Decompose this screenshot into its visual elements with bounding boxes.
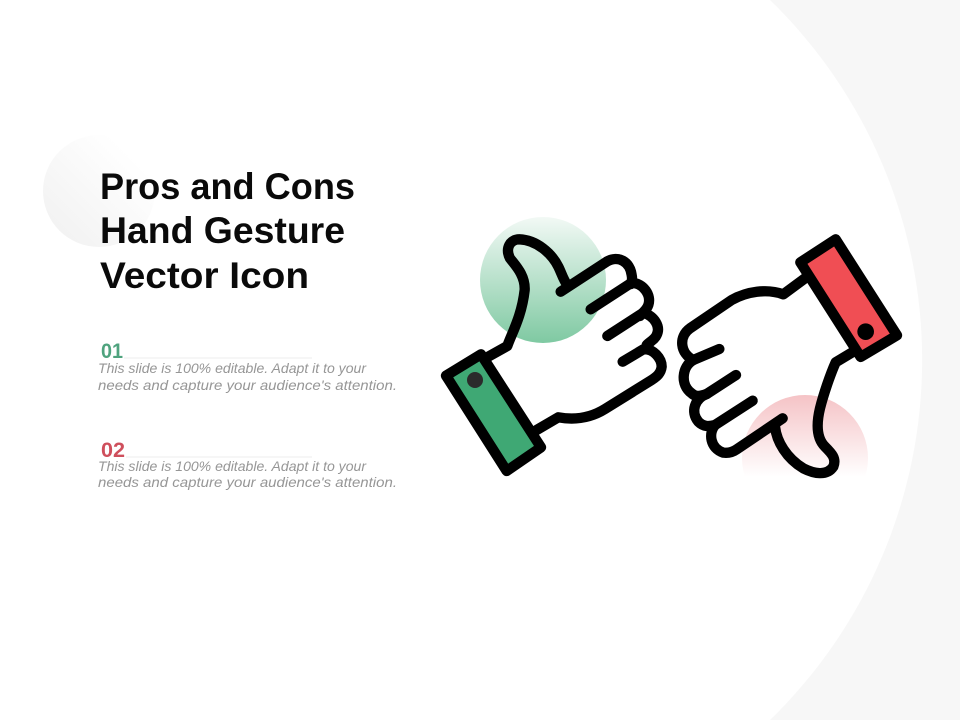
- fingers: [561, 259, 632, 292]
- icon: thumbs down hand: [682, 239, 897, 473]
- cuff button: [857, 323, 874, 340]
- icon: red circle behind thumbs down: [742, 395, 868, 521]
- icon: green circle behind thumbs up: [480, 217, 606, 343]
- background: grey right side with large white arc: [770, 0, 960, 720]
- thumb: [775, 352, 853, 473]
- item 02: cons text block: needs and capture your audience's attention.: [98, 474, 397, 490]
- decorative grey circle behind title: [43, 135, 155, 247]
- icon: thumbs up hand: [446, 239, 662, 471]
- hand outline: [488, 239, 567, 357]
- item 01: pros text block: [98, 340, 397, 393]
- item 01: pros text block: This slide is 100% editable. Adapt it to your: [98, 360, 367, 376]
- item 01: pros text block: 01: [101, 340, 123, 363]
- green cuff: [446, 354, 541, 471]
- title: Vector Icon: [100, 255, 309, 296]
- cuff button: [467, 372, 483, 388]
- red cuff: [800, 239, 897, 357]
- fingers: [684, 360, 736, 396]
- item 01: pros text block: needs and capture your audience's attention.: [98, 377, 397, 393]
- title: [100, 166, 355, 296]
- item 02: cons text block: [98, 439, 397, 490]
- item 02: cons text block: 02: [101, 439, 125, 462]
- hand outline and first finger: [682, 278, 805, 360]
- title: Pros and Cons: [100, 166, 355, 207]
- title: Hand Gesture: [100, 210, 345, 251]
- item 02: cons text block: This slide is 100% editable. Adapt it to your: [98, 458, 367, 474]
